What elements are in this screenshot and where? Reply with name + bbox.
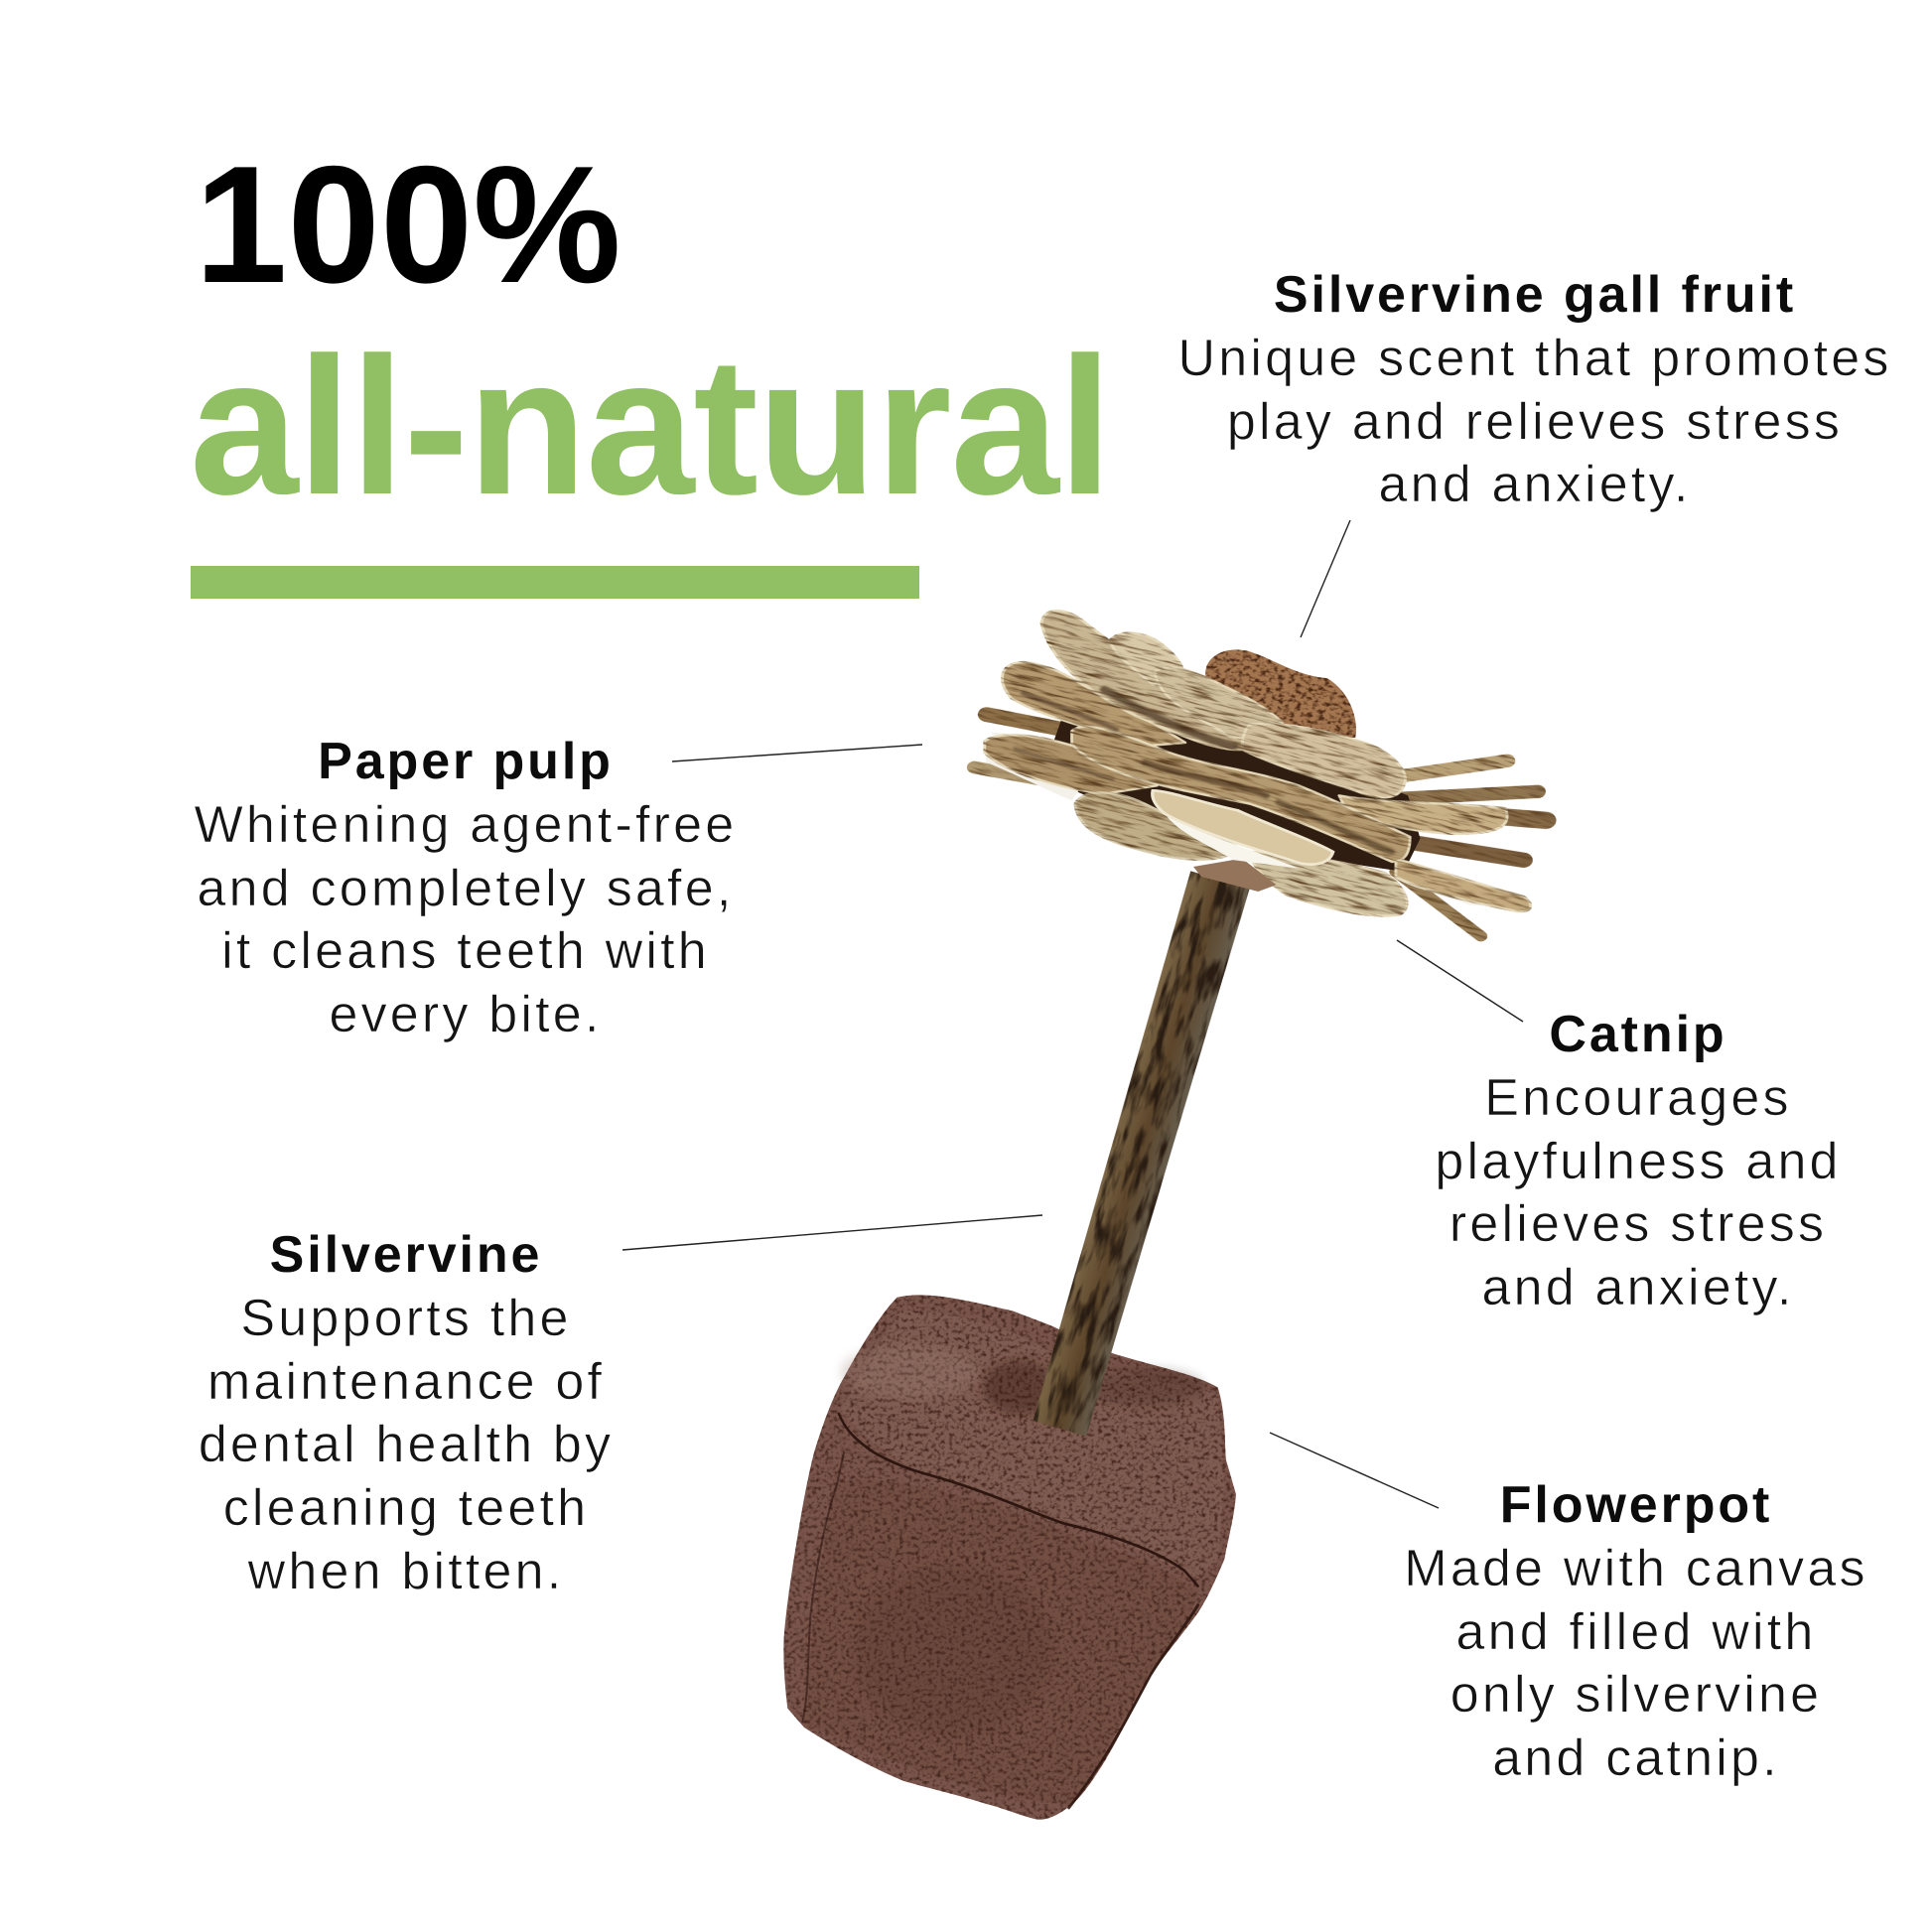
text block: paper pulp: Whitening agent-free (195, 796, 737, 854)
green accent bar (191, 566, 919, 599)
text block: flowerpot: and filled with (1455, 1603, 1817, 1661)
text block: flowerpot (1404, 1476, 1868, 1787)
text block: flowerpot: and catnip. (1492, 1729, 1780, 1787)
text block: silvervine: Supports the (240, 1290, 572, 1347)
text block: silvervine gall fruit (1177, 266, 1892, 513)
heading: 100%: 100% (195, 131, 621, 318)
text block: flowerpot: only silvervine (1450, 1666, 1822, 1724)
petals (881, 485, 1635, 1040)
leader line: catnip (1397, 940, 1523, 1022)
text block: flowerpot: Flowerpot (1500, 1476, 1772, 1534)
back sticks (898, 584, 1621, 1066)
text block: catnip (1435, 1006, 1842, 1316)
text block: silvervine: Silvervine (270, 1226, 542, 1284)
text block: silvervine gall fruit: and anxiety. (1379, 456, 1691, 513)
pot top highlights and dent (841, 1345, 1204, 1735)
text block: flowerpot: Made with canvas (1404, 1540, 1868, 1597)
text block: silvervine gall fruit: play and relieves stress (1227, 393, 1843, 451)
text block: catnip: Encourages (1484, 1069, 1792, 1127)
text block: silvervine (199, 1226, 614, 1600)
text block: silvervine: maintenance of (207, 1353, 605, 1411)
leader line: gall fruit (1301, 520, 1350, 637)
text block: silvervine gall fruit: Silvervine gall fruit (1274, 266, 1796, 324)
text block: paper pulp: every bite. (329, 986, 603, 1043)
text block: silvervine: dental health by (199, 1416, 614, 1473)
text block: silvervine: cleaning teeth (223, 1479, 589, 1537)
dark inner body (1047, 713, 1420, 872)
silvervine stem (1031, 871, 1250, 1438)
text block: catnip: and anxiety. (1482, 1259, 1794, 1316)
knob under flower (1193, 859, 1277, 892)
leader line: paper pulp (672, 745, 922, 761)
flowerpot (783, 1295, 1236, 1820)
text block: paper pulp (195, 733, 737, 1043)
text block: paper pulp: and completely safe, (198, 860, 734, 917)
silvervine gall fruit (1205, 649, 1356, 738)
heading: all-natural: all-natural (190, 317, 1111, 535)
white paper layers (985, 733, 1509, 908)
text block: silvervine: when bitten. (248, 1543, 564, 1600)
text block: paper pulp: it cleans teeth with (221, 922, 710, 980)
cream lower petal (1153, 790, 1333, 869)
text block: silvervine gall fruit: Unique scent that promotes (1177, 330, 1892, 387)
text block: catnip: playfulness and (1435, 1133, 1842, 1190)
leader line: silvervine (622, 1215, 1042, 1250)
text block: catnip: relieves stress (1449, 1195, 1827, 1253)
text block: catnip: Catnip (1549, 1006, 1727, 1063)
flower head (881, 485, 1635, 1066)
dark petal streaks (1015, 690, 1392, 852)
pot seams (802, 1414, 1198, 1808)
leader line: flowerpot (1270, 1433, 1439, 1508)
text block: paper pulp: Paper pulp (318, 733, 614, 790)
